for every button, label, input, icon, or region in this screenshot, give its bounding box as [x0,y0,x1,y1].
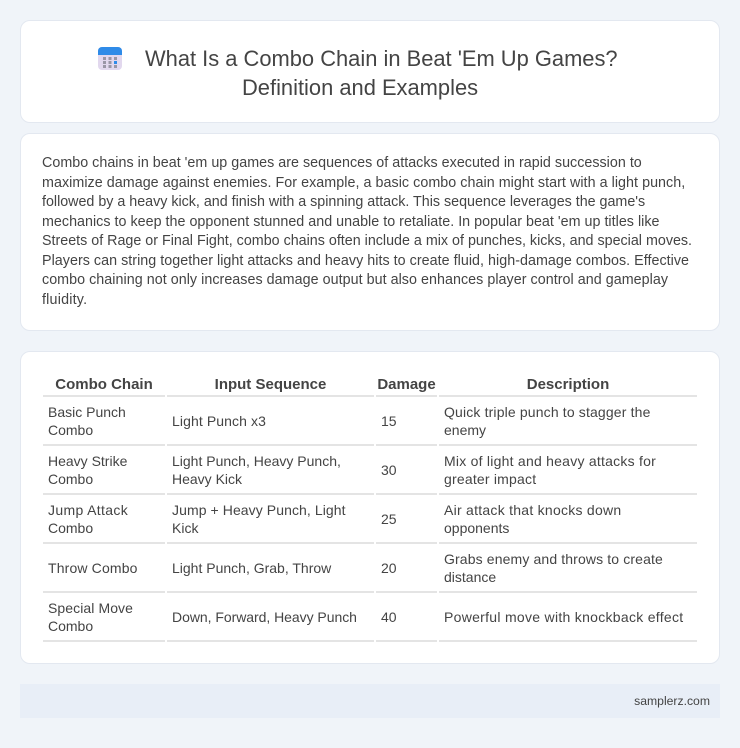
title: Definition and Examples [242,75,478,100]
footer: source: samplerz.com [634,694,710,708]
table: combo chains [43,376,697,642]
table row: Basic Punch Combo: enemy [444,422,486,438]
table row: Heavy Strike Combo: Mix of light and heavy attacks for [444,453,656,469]
table row: Special Move Combo: Powerful move with knockback effect [444,609,683,625]
icon: calendar [98,47,122,70]
table row: Jump Attack Combo: Jump Attack [48,502,128,518]
table row: Throw Combo: Grabs enemy and throws to create [444,551,663,567]
table header row: Damage [377,376,436,393]
table header row: Combo Chain [55,376,153,393]
title: What Is a Combo Chain in Beat 'Em Up Games? [145,46,618,71]
table row: Throw Combo: 20 [381,560,397,576]
table row: Throw Combo [48,551,663,585]
table row: Jump Attack Combo: Jump + Heavy Punch, Light [172,502,346,518]
table row: Special Move Combo: Combo [48,618,93,634]
table header row: Input Sequence [215,376,326,393]
table row: Heavy Strike Combo: Combo [48,471,93,487]
table row: Heavy Strike Combo: 30 [381,462,397,478]
footer: source [20,684,720,718]
table row: Basic Punch Combo: Quick triple punch to stagger the [444,404,651,420]
text block: description: mechanics to keep the opponent stunned and unable to retaliate. In popular beat 'em up titles like [42,214,660,230]
table row: Basic Punch Combo: Light Punch x3 [172,413,266,429]
table row: Jump Attack Combo: opponents [444,520,509,536]
table row: Special Move Combo [48,600,684,634]
text block: description: maximize damage against enemies. For example, a basic combo chain might start with a light punch, [42,174,685,190]
table row: Heavy Strike Combo: Heavy Kick [172,471,242,487]
text block: description: Players can string together light attacks and heavy hits to create fluid, high-damage combos. Effective [42,252,689,268]
table row: Heavy Strike Combo [48,453,656,487]
table row: Jump Attack Combo [48,502,621,536]
table row: Special Move Combo: Down, Forward, Heavy Punch [172,609,357,625]
text block: description: followed by a heavy kick, and finish with a spinning attack. This sequence leverages the game's [42,194,645,210]
table row: Heavy Strike Combo: greater impact [444,471,536,487]
table row: Throw Combo: Throw Combo [48,560,138,576]
table row: Jump Attack Combo: Air attack that knocks down [444,502,621,518]
table row: Heavy Strike Combo: Heavy Strike [48,453,127,469]
table row: Special Move Combo: Special Move [48,600,133,616]
table header row [55,376,609,393]
table header row: Description [527,376,609,393]
text block: description [42,155,692,308]
text block: description: fluidity. [42,292,87,308]
table row: Jump Attack Combo: 25 [381,511,397,527]
table row: Throw Combo: distance [444,569,496,585]
text block: description: Streets of Rage or Final Fight, combo chains often include a mix of punches, kicks, and special moves. [42,233,692,249]
table row: Basic Punch Combo: Combo [48,422,93,438]
table row: Throw Combo: Light Punch, Grab, Throw [172,560,331,576]
table row: Heavy Strike Combo: Light Punch, Heavy Punch, [172,453,341,469]
text block: description: Combo chains in beat 'em up games are sequences of attacks executed in rapid succession to [42,155,642,171]
table row: Basic Punch Combo: Basic Punch [48,404,126,420]
table row: Basic Punch Combo: 15 [381,413,397,429]
text block: description: combo chaining not only increases damage output but also enhances player control and gameplay [42,272,668,288]
table row: Jump Attack Combo: Combo [48,520,93,536]
table row: Special Move Combo: 40 [381,609,397,625]
table row: Basic Punch Combo [48,404,651,438]
table row: Jump Attack Combo: Kick [172,520,198,536]
panel: header [20,20,720,123]
panel: description [20,133,720,331]
panel: table [20,351,720,664]
title [145,46,618,100]
